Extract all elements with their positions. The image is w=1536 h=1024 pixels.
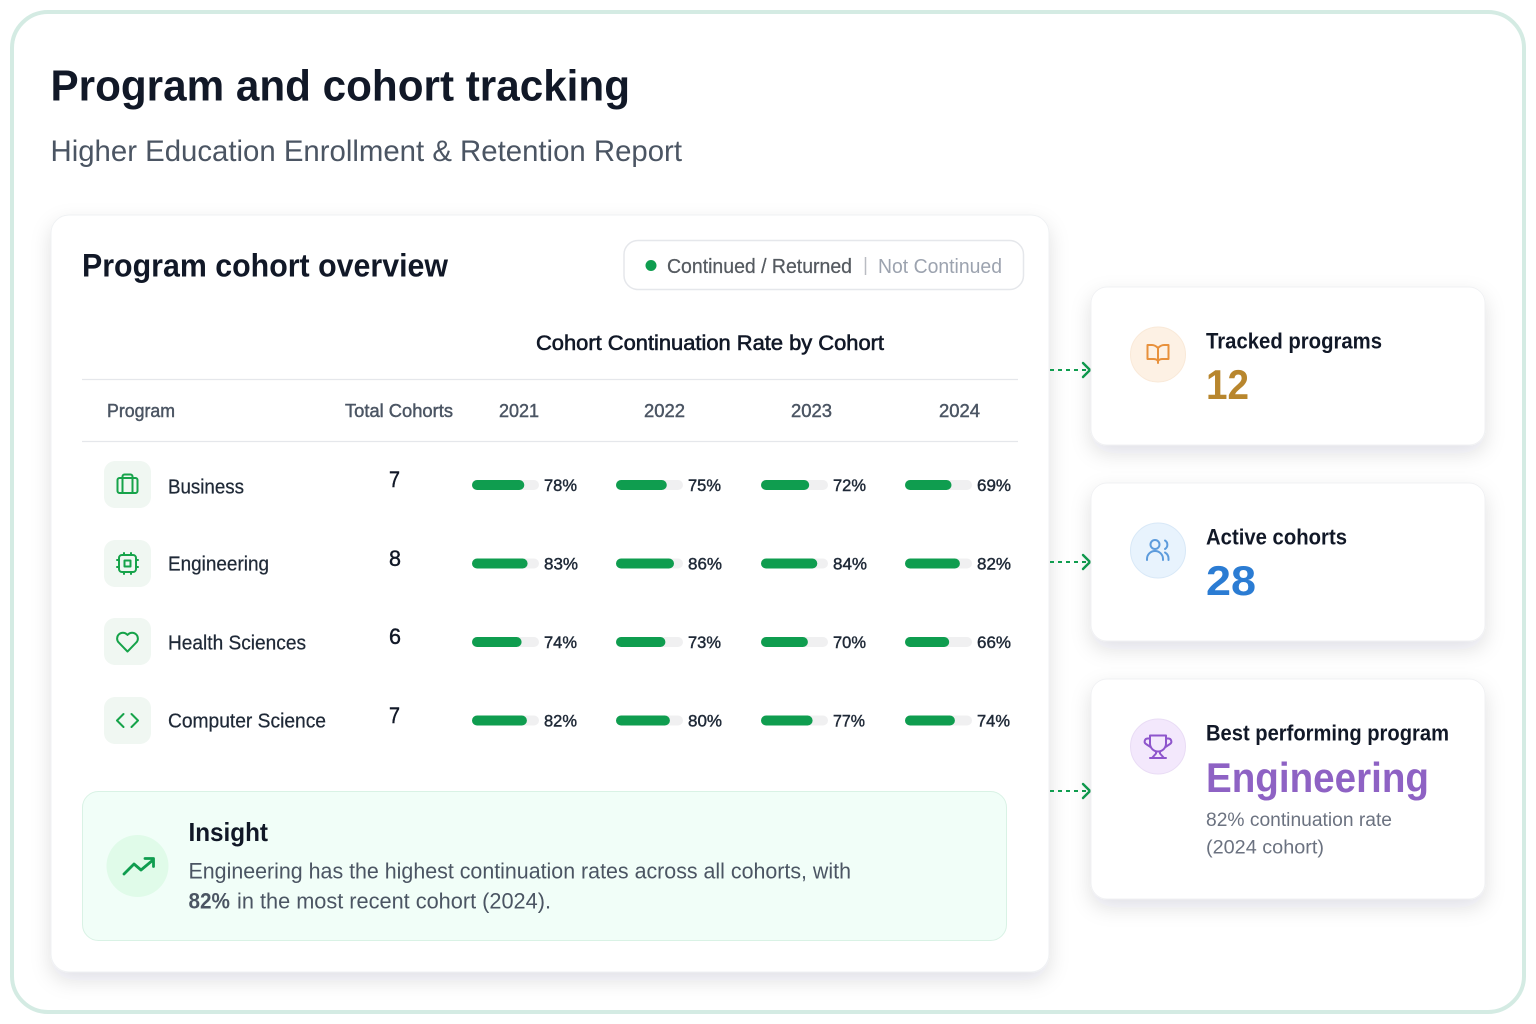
bar 2022: 80% xyxy=(688,712,722,730)
bar 2021: 74% xyxy=(544,633,577,652)
program name: Engineering xyxy=(168,554,269,576)
bar 2023 xyxy=(761,712,865,730)
bar 2021 xyxy=(472,633,577,652)
table header: 2023 xyxy=(791,401,832,421)
table header: 2021 xyxy=(499,401,539,421)
total cohorts: 8 xyxy=(389,546,401,571)
insight text: Engineering has the highest continuation rates across all cohorts, with xyxy=(188,858,851,884)
card value: 28 xyxy=(1206,557,1256,604)
icon: open book xyxy=(1130,327,1186,382)
icon: chip xyxy=(104,540,151,587)
total cohorts: 6 xyxy=(389,624,401,649)
arrow: to best performing program xyxy=(1050,784,1090,798)
total cohorts: 7 xyxy=(389,467,400,492)
total cohorts: 7 xyxy=(389,703,400,728)
icon: heart xyxy=(104,618,151,665)
bar 2022 xyxy=(616,476,721,495)
card value: Engineering xyxy=(1206,754,1429,801)
arrow: to tracked programs xyxy=(1050,363,1090,377)
card label: Tracked programs xyxy=(1206,328,1382,354)
card label: Best performing program xyxy=(1206,720,1449,746)
bar 2022: 75% xyxy=(688,476,721,495)
bar 2024 xyxy=(905,633,1011,652)
program name: Computer Science xyxy=(168,710,326,732)
bar 2024: 66% xyxy=(977,633,1011,652)
card label: Active cohorts xyxy=(1206,524,1347,550)
bar 2022: 73% xyxy=(688,633,721,652)
bar 2024: 69% xyxy=(977,476,1011,495)
icon: trophy xyxy=(1130,719,1186,774)
bar 2024 xyxy=(905,712,1010,730)
bar 2024 xyxy=(905,554,1011,574)
table header: Total Cohorts xyxy=(345,401,453,421)
insight text: 82% xyxy=(188,888,230,914)
bar 2023: 72% xyxy=(833,476,866,495)
panel: best performing program xyxy=(1091,679,1485,899)
card value: 12 xyxy=(1206,361,1249,408)
legend: Not Continued xyxy=(878,256,1002,278)
panel heading: Program cohort overview xyxy=(82,248,448,284)
program name: Health Sciences xyxy=(168,632,306,654)
panel: program cohort overview xyxy=(51,215,1485,972)
chart heading: Cohort Continuation Rate by Cohort xyxy=(536,332,884,355)
insight text xyxy=(188,858,851,914)
bar 2023 xyxy=(761,554,867,574)
bar 2023 xyxy=(761,633,866,652)
icon: code xyxy=(104,697,151,744)
icon: users xyxy=(1130,523,1186,578)
bar 2023 xyxy=(761,476,866,495)
bar 2021: 83% xyxy=(544,554,578,574)
insight text: in the most recent cohort (2024). xyxy=(237,888,551,914)
bar 2021 xyxy=(472,476,577,495)
title: Program and cohort tracking xyxy=(50,62,630,110)
bar 2021: 82% xyxy=(544,712,577,730)
bar 2022: 86% xyxy=(688,554,722,574)
bar 2022 xyxy=(616,712,722,730)
row: Business xyxy=(104,461,1011,508)
arrow: to active cohorts xyxy=(1050,555,1090,569)
icon: trending up xyxy=(106,835,168,897)
table header: Program xyxy=(107,401,175,421)
card detail: (2024 cohort) xyxy=(1206,838,1324,858)
table header: 2022 xyxy=(644,401,685,421)
icon: briefcase xyxy=(104,461,151,508)
card detail xyxy=(1206,810,1392,858)
table header: 2024 xyxy=(939,401,980,421)
table header xyxy=(107,401,980,421)
bar 2024 xyxy=(905,476,1011,495)
row: Engineering xyxy=(104,540,1011,587)
legend xyxy=(624,240,1024,290)
panel: tracked programs xyxy=(1091,287,1485,445)
bar 2023: 84% xyxy=(833,554,867,574)
bar 2022 xyxy=(616,554,722,574)
row: Computer Science xyxy=(104,697,1010,744)
bar 2023: 70% xyxy=(833,633,866,652)
row: Health Sciences xyxy=(104,618,1011,665)
bar 2023: 77% xyxy=(833,712,865,730)
bar 2021 xyxy=(472,712,577,730)
insight heading: Insight xyxy=(188,817,268,847)
callout: insight xyxy=(82,792,1006,940)
subtitle: Higher Education Enrollment & Retention Report xyxy=(50,135,683,168)
bar 2024: 74% xyxy=(977,712,1010,730)
bar 2024: 82% xyxy=(977,554,1011,574)
panel: active cohorts xyxy=(1091,483,1485,641)
legend: Continued / Returned xyxy=(667,256,852,278)
bar 2021 xyxy=(472,554,578,574)
bar 2021: 78% xyxy=(544,476,577,495)
bar 2022 xyxy=(616,633,721,652)
program name: Business xyxy=(168,476,244,498)
card detail: 82% continuation rate xyxy=(1206,810,1392,831)
